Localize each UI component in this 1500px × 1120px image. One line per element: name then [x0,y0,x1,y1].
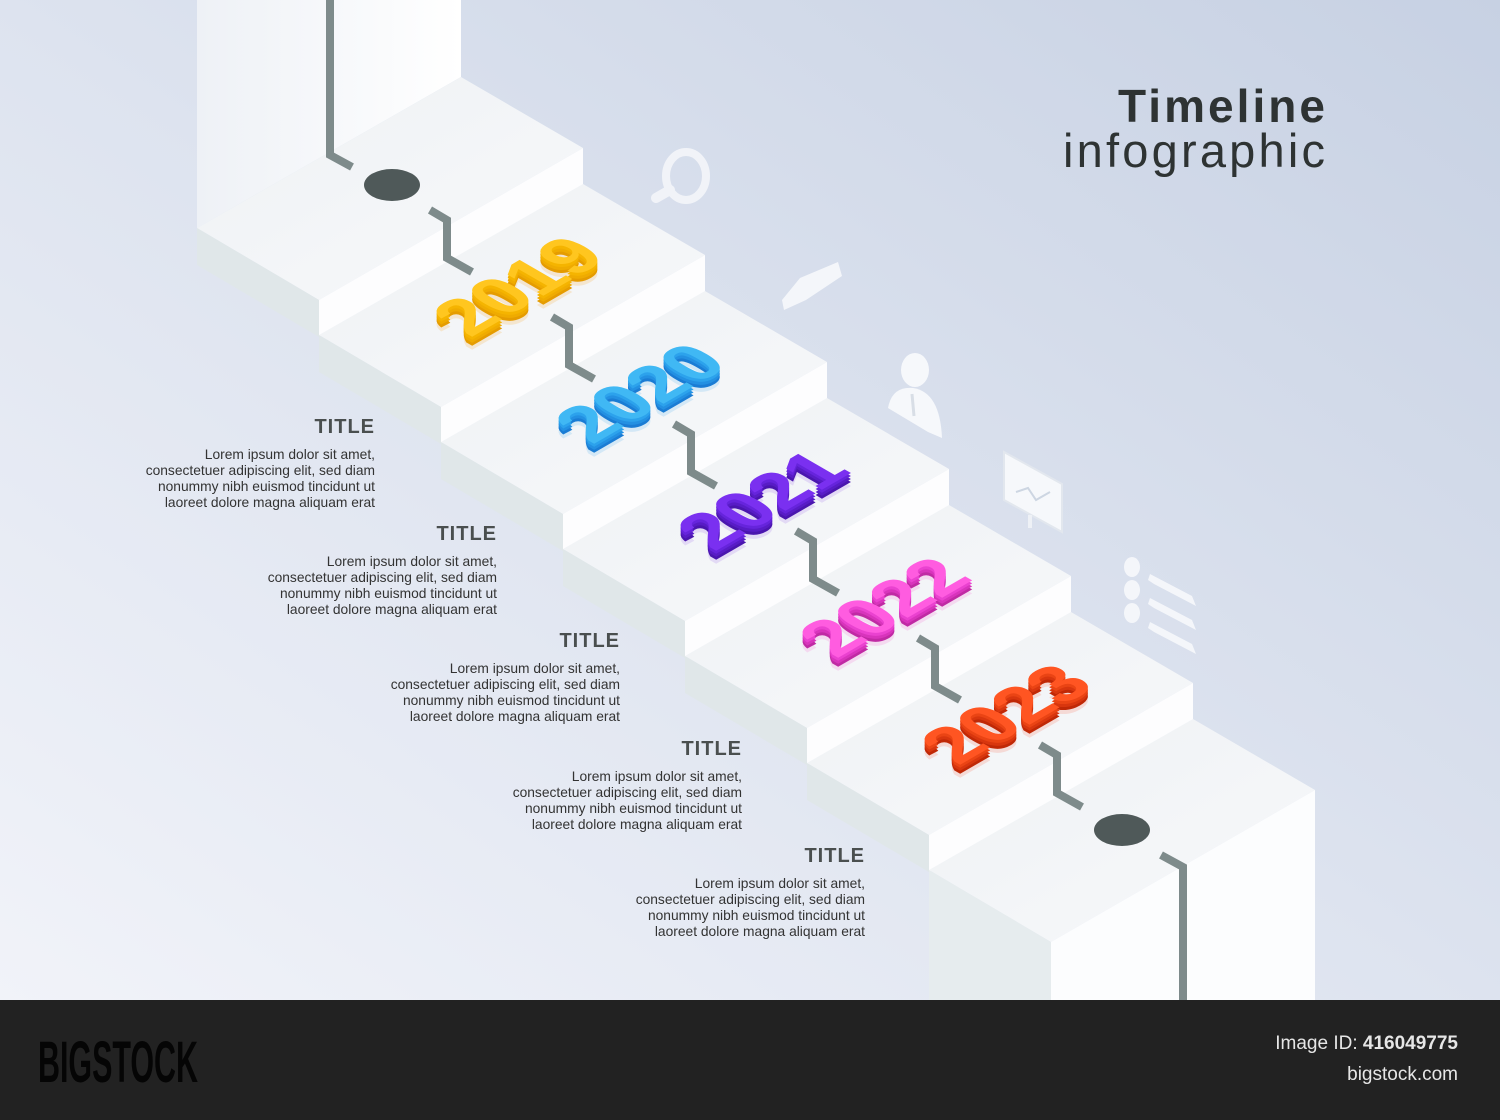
text block 5: consectetuer adipiscing elit, sed diam [636,892,865,907]
icon: person [888,353,942,438]
year 2023: 2023 [903,657,1111,777]
text block 1: laoreet dolore magna aliquam erat [165,495,375,510]
year 2022: 2022 [781,553,989,673]
text block 3: nonummy nibh euismod tincidunt ut [403,693,620,708]
year 2023: 2023 [903,660,1111,780]
text block 2: Lorem ipsum dolor sit amet, [327,554,497,569]
text block 5: Lorem ipsum dolor sit amet, [695,876,865,891]
footer bar [0,1000,1500,1120]
text block 1: consectetuer adipiscing elit, sed diam [146,463,375,478]
footer bar: Image ID: 416049775 [1275,1033,1458,1054]
footer bar: bigstock.com [1347,1064,1458,1085]
text block 3: Lorem ipsum dolor sit amet, [450,661,620,676]
text block 4: laoreet dolore magna aliquam erat [532,817,742,832]
text block 5 [636,845,865,939]
year 2020: 2020 [537,333,745,453]
text block 2: laoreet dolore magna aliquam erat [287,602,497,617]
title: infographic [1063,124,1325,177]
text block 2: nonummy nibh euismod tincidunt ut [280,586,497,601]
year 2019: 2019 [415,232,623,352]
year 2019: 2019 [415,235,623,355]
year 2020: 2020 [537,336,745,456]
year 2020: 2020 [537,339,745,459]
text block 4: Lorem ipsum dolor sit amet, [572,769,742,784]
text block 2: TITLE [436,523,497,545]
year 2023: 2023 [903,654,1111,774]
text block 2 [268,523,497,617]
year 2021: 2021 [659,453,867,573]
start dot [364,169,420,201]
timeline path [330,0,1183,1000]
icon: list [1124,557,1196,654]
text block 3: consectetuer adipiscing elit, sed diam [391,677,620,692]
text block 5: laoreet dolore magna aliquam erat [655,924,865,939]
year 2023: 2023 [903,667,1111,787]
text block 1: Lorem ipsum dolor sit amet, [205,447,375,462]
year 2022: 2022 [781,556,989,676]
text block 4: nonummy nibh euismod tincidunt ut [525,801,742,816]
year 2020: 2020 [537,342,745,462]
year 2021: 2021 [659,449,867,569]
text block 2: consectetuer adipiscing elit, sed diam [268,570,497,585]
text block 5: TITLE [804,845,865,867]
year 2020: 2020 [537,346,745,466]
title [1063,80,1325,177]
text block 3: TITLE [559,630,620,652]
text block 3 [391,630,620,724]
icon: magnifier [656,152,706,200]
year 2019: 2019 [415,226,623,346]
year 2022: 2022 [781,550,989,670]
text block 4: TITLE [681,738,742,760]
text block 4: consectetuer adipiscing elit, sed diam [513,785,742,800]
year 2021: 2021 [659,443,867,563]
text block 1 [146,416,375,510]
text block 3: laoreet dolore magna aliquam erat [410,709,620,724]
year 2019: 2019 [415,229,623,349]
staircase [197,0,1315,1000]
year 2021: 2021 [659,440,867,560]
text block 1: TITLE [314,416,375,438]
year 2021: 2021 [659,446,867,566]
icon: pencil [782,262,842,310]
title: Timeline [1118,80,1325,132]
year 2019: 2019 [415,239,623,359]
footer bar: BIGSTOCK [38,1030,198,1095]
text block 4 [513,738,742,832]
text block 1: nonummy nibh euismod tincidunt ut [158,479,375,494]
year 2023: 2023 [903,663,1111,783]
year 2022: 2022 [781,547,989,667]
text block 5: nonummy nibh euismod tincidunt ut [648,908,865,923]
icon: presentation board [1004,452,1062,532]
year 2022: 2022 [781,560,989,680]
end dot [1094,814,1150,846]
